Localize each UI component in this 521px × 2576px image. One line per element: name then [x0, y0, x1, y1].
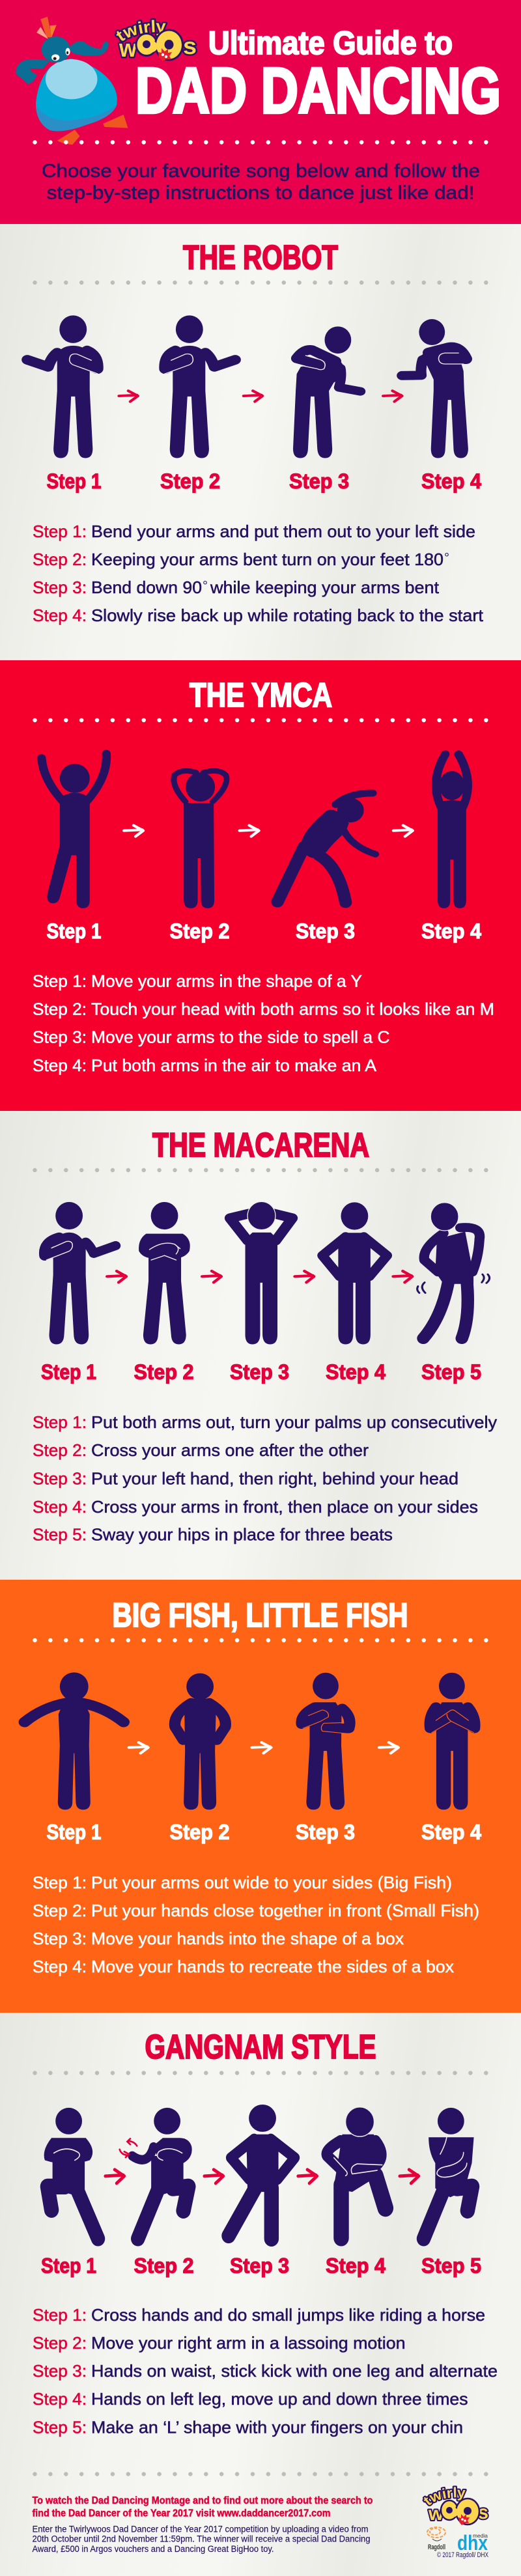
step labels: [47, 469, 481, 493]
arrow: [393, 826, 413, 837]
figure: step 1: [45, 1202, 116, 1345]
instructions: Step 2:: [33, 2333, 87, 2353]
arrow: [379, 1743, 399, 1753]
panel: header: [0, 0, 521, 224]
figure: step 4: [402, 319, 468, 458]
figure: step 4: [327, 2107, 386, 2238]
panel: Big Fish, Little Fish: [0, 1580, 521, 2013]
instructions: Step 4:: [33, 2389, 87, 2409]
arrow: [244, 391, 262, 402]
instructions: Step 2:: [33, 1440, 87, 1460]
arrow: [295, 1271, 314, 1282]
footer terms: 20th October until 2nd November 11:59pm. The winner will receive a special Dad Dancing: [33, 2534, 370, 2543]
figure: step 2: [120, 2108, 192, 2239]
intro text: step-by-step instructions to dance just like dad!: [47, 182, 474, 203]
figure: step 1: [44, 2108, 98, 2239]
instructions: Step 2:: [33, 999, 87, 1018]
footer terms: [33, 2524, 370, 2554]
instructions: Step 2:: [33, 1901, 87, 1920]
intro text: Choose your favourite song below and follow the: [42, 161, 480, 182]
figure: step 5: [417, 1203, 490, 1338]
figure: step 5: [424, 2108, 474, 2239]
step labels: [41, 1360, 481, 1384]
logo: DHX Media: media: [473, 2532, 488, 2539]
instructions: Touch your head with both arms so it looks like an M: [91, 999, 494, 1018]
instructions: Step 4:: [33, 1497, 87, 1517]
step labels: Step 2: [169, 1821, 229, 1844]
instructions: Move your arms to the side to spell a C: [91, 1028, 389, 1047]
figure: step 2: [174, 771, 227, 908]
instructions: [33, 2305, 498, 2437]
figures: The Macarena: [45, 1201, 490, 1345]
arrow: [252, 1743, 271, 1753]
figure: step 4: [430, 1673, 475, 1810]
figure: step 3: [230, 1201, 292, 1345]
step labels: Step 2: [169, 919, 229, 943]
instructions: Move your hands to recreate the sides of a box: [91, 1957, 454, 1976]
figure: step 2: [139, 1202, 190, 1345]
logo: Twirlywoos: oo: [137, 31, 181, 58]
panel: The Macarena: [0, 1111, 521, 1580]
instructions: Make an ‘L’ shape with your fingers on your chin: [91, 2417, 463, 2437]
instructions: [33, 522, 484, 625]
instructions: Step 3:: [33, 1929, 87, 1948]
instructions: Step 5:: [33, 2417, 87, 2437]
step labels: [47, 919, 481, 943]
step labels: Step 5: [421, 2254, 481, 2278]
step labels: Step 2: [134, 2254, 194, 2278]
step labels: Step 3: [230, 1360, 289, 1384]
step labels: Step 3: [296, 919, 355, 943]
instructions: Cross your arms one after the other: [91, 1440, 369, 1460]
instructions: Bend down 90: [91, 578, 202, 597]
arrow: [129, 1743, 148, 1753]
figures: Big Fish, Little Fish: [25, 1672, 475, 1810]
instructions: Move your right arm in a lassoing motion: [91, 2333, 405, 2353]
logo: Twirlywoos: s: [183, 33, 197, 59]
step labels: Step 1: [41, 2254, 96, 2278]
heading: The YMCA: THE YMCA: [190, 677, 332, 714]
intro text: [42, 161, 480, 203]
instructions: Put both arms out, turn your palms up consecutively: [91, 1412, 497, 1432]
step labels: Step 4: [421, 1821, 481, 1844]
logo: Twirlywoos small: twirly: [422, 2485, 467, 2506]
heading: Big Fish, Little Fish: BIG FISH, LITTLE FISH: [112, 1597, 408, 1634]
copyright: © 2017 Ragdoll/ DHX: [437, 2551, 488, 2559]
figures: The Robot: [27, 315, 468, 458]
logo: Ragdoll: [427, 2527, 445, 2551]
arrow: [400, 2170, 419, 2183]
figure: step 3: [277, 793, 376, 903]
figure: step 1: [27, 315, 98, 458]
arrow: [204, 2170, 223, 2183]
step labels: Step 4: [421, 469, 481, 493]
instructions: Cross hands and do small jumps like riding a horse: [91, 2305, 485, 2325]
instructions: Step 3:: [33, 1028, 87, 1047]
heading: The Robot: THE ROBOT: [183, 239, 338, 277]
instructions: Step 3:: [33, 2361, 87, 2381]
footer call to action: [33, 2495, 373, 2519]
instructions: Step 1:: [33, 1873, 87, 1892]
instructions: [33, 1412, 497, 1545]
step labels: Step 1: [47, 1821, 102, 1844]
instructions: Step 1:: [33, 2305, 87, 2325]
title: Ultimate Guide to: Ultimate Guide to: [208, 25, 453, 61]
logo: Twirlywoos: w: [119, 35, 137, 63]
figure: step 3: [293, 326, 361, 458]
instructions: Move your arms in the shape of a Y: [91, 972, 362, 991]
instructions: while keeping your arms bent: [210, 578, 440, 597]
footer terms: Enter the Twirlywoos Dad Dancer of the Year 2017 competition by uploading a video from: [33, 2524, 369, 2534]
instructions: °: [444, 551, 449, 565]
step labels: [41, 2254, 481, 2278]
instructions: Slowly rise back up while rotating back to the start: [91, 606, 484, 625]
step labels: Step 1: [47, 919, 102, 943]
instructions: Step 4:: [33, 1957, 87, 1976]
footer terms: Award, £500 in Argos vouchers and a Dancing Great BigHoo toy.: [33, 2544, 274, 2554]
instructions: Step 5:: [33, 1525, 87, 1545]
instructions: Hands on waist, stick kick with one leg and alternate: [91, 2361, 498, 2381]
instructions: Move your hands into the shape of a box: [91, 1929, 404, 1948]
step labels: Step 4: [326, 2254, 386, 2278]
figure: step 4: [322, 1202, 387, 1345]
instructions: Step 4:: [33, 606, 87, 625]
figures: The YMCA: [42, 753, 468, 908]
step labels: Step 4: [421, 919, 481, 943]
step labels: Step 3: [289, 469, 349, 493]
instructions: Step 2:: [33, 550, 87, 569]
figure: step 1: [25, 1672, 124, 1810]
figure: step 1: [42, 753, 106, 908]
step labels: [47, 1821, 481, 1844]
logo: Twirlywoos: twirly: [115, 18, 168, 43]
figures: Gangnam Style: [44, 2105, 474, 2239]
instructions: Hands on left leg, move up and down three times: [91, 2389, 468, 2409]
figure: step 2: [175, 1673, 225, 1810]
panel: Gangnam Style: [0, 2013, 521, 2576]
logo: Twirlywoos: [115, 18, 198, 63]
logo: Ragdoll: Ragdoll: [428, 2543, 445, 2551]
heading: The Macarena: THE MACARENA: [152, 1127, 369, 1164]
arrow: [119, 391, 138, 402]
step labels: Step 3: [296, 1821, 355, 1844]
logo: Twirlywoos small: [422, 2485, 489, 2525]
arrow: [202, 1271, 221, 1282]
arrow: [240, 826, 259, 837]
instructions: Sway your hips in place for three beats: [91, 1525, 393, 1545]
heading: Gangnam Style: GANGNAM STYLE: [145, 2028, 376, 2066]
figure: step 2: [165, 315, 235, 458]
instructions: [33, 1873, 479, 1976]
icon: Twirlywoos mascot: [16, 17, 128, 145]
arrow: [298, 2170, 317, 2183]
step labels: Step 2: [160, 469, 220, 493]
panel: The YMCA: [0, 660, 521, 1111]
logo: Twirlywoos small: oo: [442, 2500, 477, 2522]
arrow: [107, 1271, 126, 1282]
step labels: Step 5: [421, 1360, 481, 1384]
logo: Twirlywoos small: s: [478, 2502, 488, 2523]
step labels: Step 4: [326, 1360, 386, 1384]
arrow: [393, 1271, 412, 1282]
instructions: Step 3:: [33, 1469, 87, 1489]
step labels: Step 2: [134, 1360, 194, 1384]
instructions: Cross your arms in front, then place on your sides: [91, 1497, 478, 1517]
instructions: Step 1:: [33, 1412, 87, 1432]
instructions: [33, 972, 494, 1075]
figure: step 4: [436, 754, 468, 908]
instructions: Step 1:: [33, 972, 87, 991]
instructions: Step 1:: [33, 522, 87, 541]
instructions: Put your arms out wide to your sides (Big Fish): [91, 1873, 452, 1892]
arrow: [106, 2170, 124, 2183]
logo: DHX Media: dhx: [457, 2531, 488, 2555]
instructions: Put both arms in the air to make an A: [91, 1056, 377, 1075]
step labels: Step 1: [41, 1360, 96, 1384]
step labels: Step 3: [230, 2254, 289, 2278]
step labels: Step 1: [47, 469, 102, 493]
instructions: Step 3:: [33, 578, 87, 597]
arrow: [383, 391, 402, 402]
instructions: °: [203, 579, 208, 593]
instructions: Put your left hand, then right, behind your head: [91, 1469, 458, 1489]
panel: The Robot: [0, 224, 521, 660]
instructions: Keeping your arms bent turn on your feet 180: [91, 550, 444, 569]
footer call to action: To watch the Dad Dancing Montage and to find out more about the search to: [33, 2495, 373, 2506]
figure: step 3: [229, 2105, 295, 2239]
instructions: Step 4:: [33, 1056, 87, 1075]
arrow: [124, 826, 143, 837]
instructions: Bend your arms and put them out to your left side: [91, 522, 475, 541]
logo: Twirlywoos small: w: [428, 2503, 444, 2525]
figure: step 3: [302, 1673, 350, 1810]
instructions: Put your hands close together in front (Small Fish): [91, 1901, 479, 1920]
footer call to action: find the Dad Dancer of the Year 2017 visit www.daddancer2017.com: [33, 2508, 331, 2519]
